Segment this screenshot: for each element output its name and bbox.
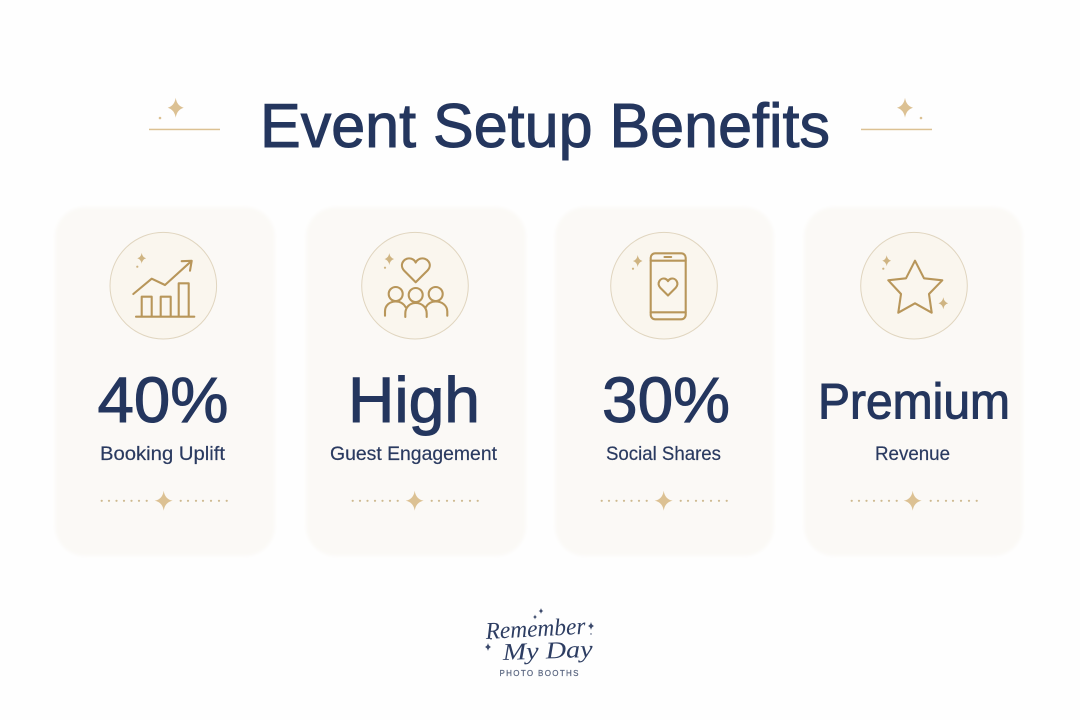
divider bbox=[101, 491, 228, 511]
icon: heart over group of people bbox=[362, 232, 468, 339]
divider bbox=[352, 491, 479, 511]
panel: premium revenue bbox=[804, 207, 1023, 556]
logo tagline: PHOTO BOOTHS bbox=[500, 669, 578, 678]
left title ornament bbox=[149, 98, 220, 130]
label: guest engagement: Guest Engagement bbox=[330, 443, 498, 465]
stat: High: High bbox=[348, 364, 480, 436]
icon: smartphone with heart bbox=[611, 232, 717, 339]
logo wordmark: Remember bbox=[484, 614, 587, 645]
icon: rising bar chart bbox=[110, 232, 217, 339]
title text: Event Setup Benefits bbox=[260, 92, 830, 161]
logo sparkles bbox=[485, 608, 594, 651]
logo bbox=[484, 608, 594, 678]
stat: 40%: 40% bbox=[98, 364, 228, 436]
icon: star bbox=[861, 232, 967, 339]
label: social shares: Social Shares bbox=[606, 443, 721, 465]
stat: 30%: 30% bbox=[602, 364, 730, 436]
stat: Premium: Premium bbox=[818, 374, 1010, 430]
label: revenue: Revenue bbox=[875, 443, 950, 465]
logo wordmark second line: My Day bbox=[501, 637, 594, 666]
panel: social shares bbox=[555, 207, 774, 556]
divider bbox=[601, 491, 728, 511]
title bbox=[149, 92, 932, 161]
label: booking uplift: Booking Uplift bbox=[100, 443, 226, 465]
panel: booking uplift bbox=[55, 207, 275, 556]
right title ornament bbox=[861, 98, 932, 130]
divider bbox=[851, 491, 978, 511]
panel: guest engagement bbox=[306, 207, 526, 556]
